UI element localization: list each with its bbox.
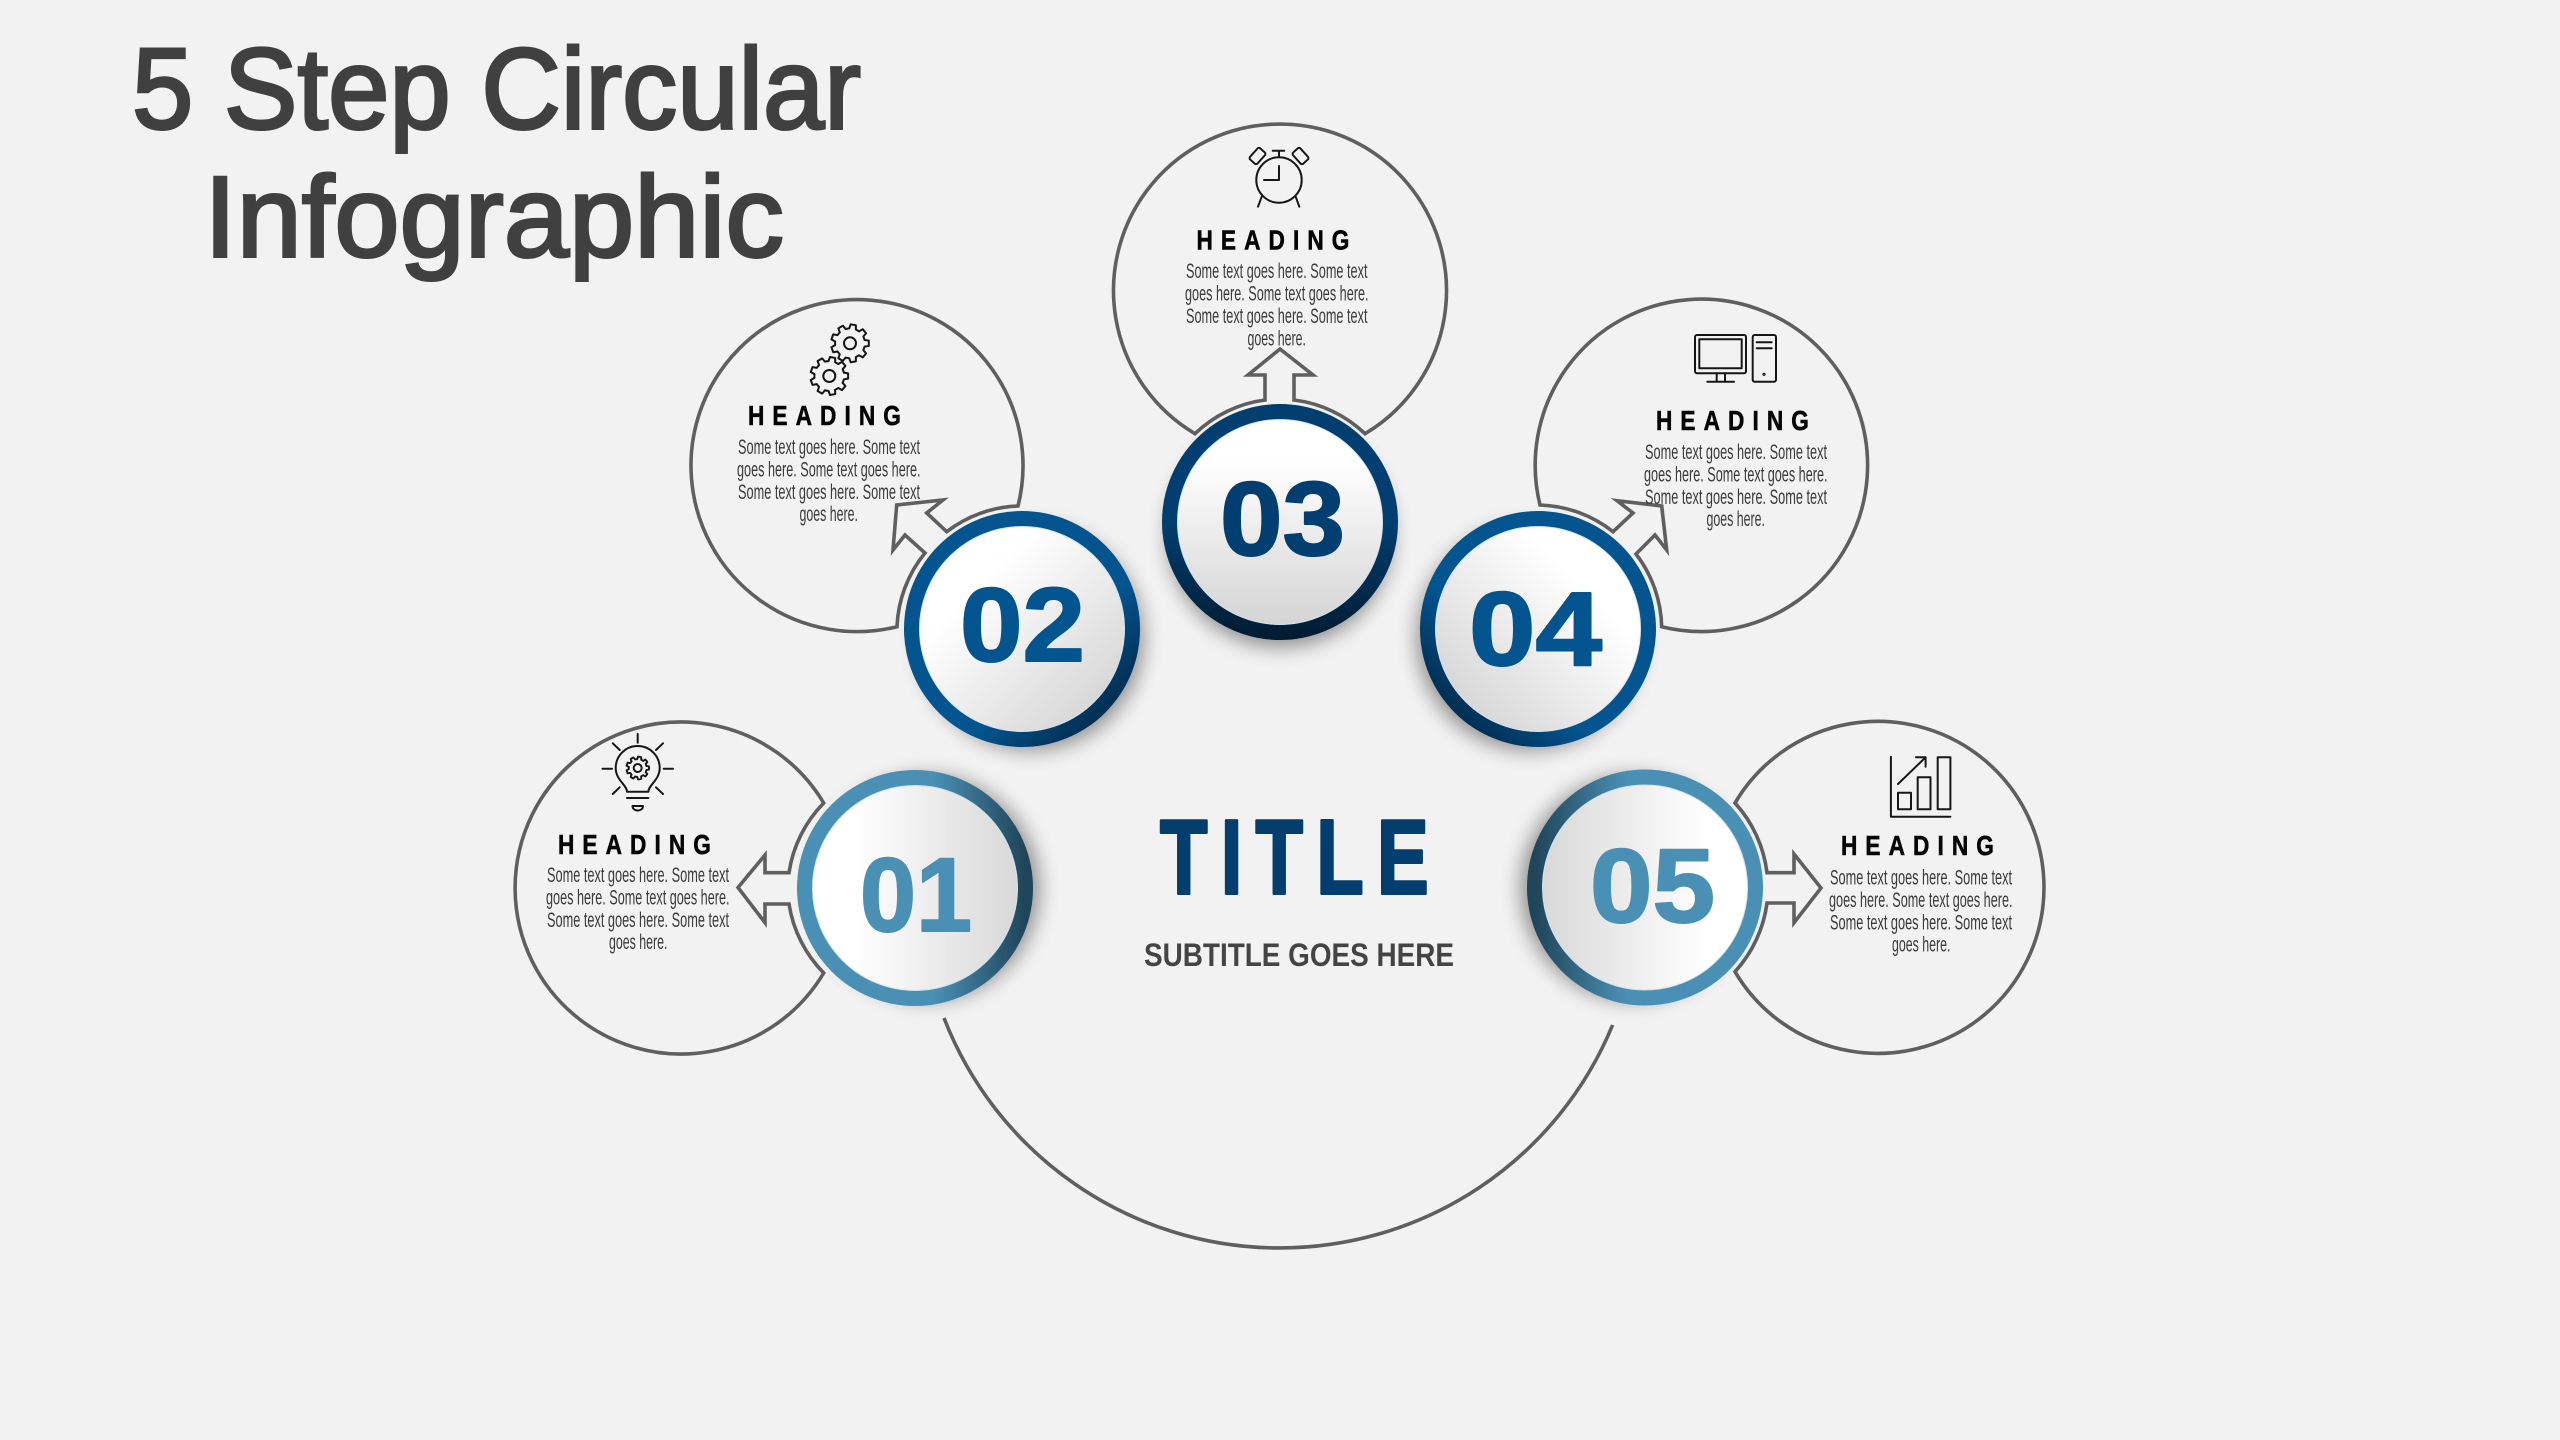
badge 02 [904,511,1143,750]
heading: HEADING [1656,405,1817,436]
panel: step 1 [515,722,1039,1054]
body text: Some text goes here. Some text [547,908,729,932]
outline circle with right arrow [1735,721,2044,1053]
icon: light bulb with gear [602,734,673,810]
body text [737,435,920,526]
body text [1185,259,1368,350]
icon: gears [809,324,869,396]
bottom arc [944,1018,1613,1248]
body text: Some text goes here. Some text [1830,866,2012,890]
body text: goes here. Some text goes here. [546,886,730,910]
body text: goes here. Some text goes here. [1829,888,2012,912]
body text: goes here. Some text goes here. [737,458,920,482]
badge 05 [1521,770,1763,1006]
subtitle: SUBTITLE GOES HERE [1144,937,1454,973]
heading: HEADING [1841,830,2002,861]
body text: Some text goes here. Some text [738,480,920,504]
main title text: TITLE [1160,798,1442,916]
heading: HEADING [1196,224,1358,256]
badge 01 [797,770,1039,1006]
icon: desktop computer [1695,335,1776,382]
badge 04 [1417,511,1656,750]
title [132,26,861,282]
outline circle with left arrow [515,722,824,1054]
body text: goes here. [1706,507,1765,531]
body text: Some text goes here. Some text [1645,440,1827,464]
heading: HEADING [748,400,909,431]
body text: Some text goes here. Some text [1186,304,1368,328]
title: Infographic [204,154,784,282]
badge 03 [1162,404,1398,647]
outline circle with up-left arrow [691,300,1023,632]
title: 5 Step Circular [132,26,861,154]
body text [546,863,730,954]
icon: alarm clock [1249,147,1309,207]
body text: Some text goes here. Some text [547,863,729,887]
panel: step 3 [1114,124,1446,647]
icon: growth chart [1891,757,1950,817]
badge 01: 01 [860,837,972,954]
body text [1829,866,2012,956]
body text [1644,440,1828,531]
panel: step 4 [1417,299,1868,750]
center title [1144,798,1454,973]
badge 02: 02 [960,567,1085,684]
body text: goes here. Some text goes here. [1185,282,1368,306]
outline circle with up-right arrow [1535,299,1868,632]
body text: goes here. [800,502,858,526]
outline circle with up arrow [1114,124,1446,434]
body text: Some text goes here. Some text [1186,259,1368,283]
panel: step 2 [691,300,1143,750]
heading: HEADING [558,829,719,860]
badge 03: 03 [1220,461,1345,578]
body text: Some text goes here. Some text [1645,485,1827,509]
badge 05: 05 [1590,828,1715,945]
badge 04: 04 [1469,571,1602,688]
panel: step 5 [1521,721,2044,1053]
body text: goes here. [609,930,668,954]
body text: goes here. Some text goes here. [1644,462,1828,486]
body text: Some text goes here. Some text [738,435,920,459]
body text: goes here. [1892,932,1950,956]
body text: Some text goes here. Some text [1830,910,2012,934]
body text: goes here. [1248,326,1306,350]
